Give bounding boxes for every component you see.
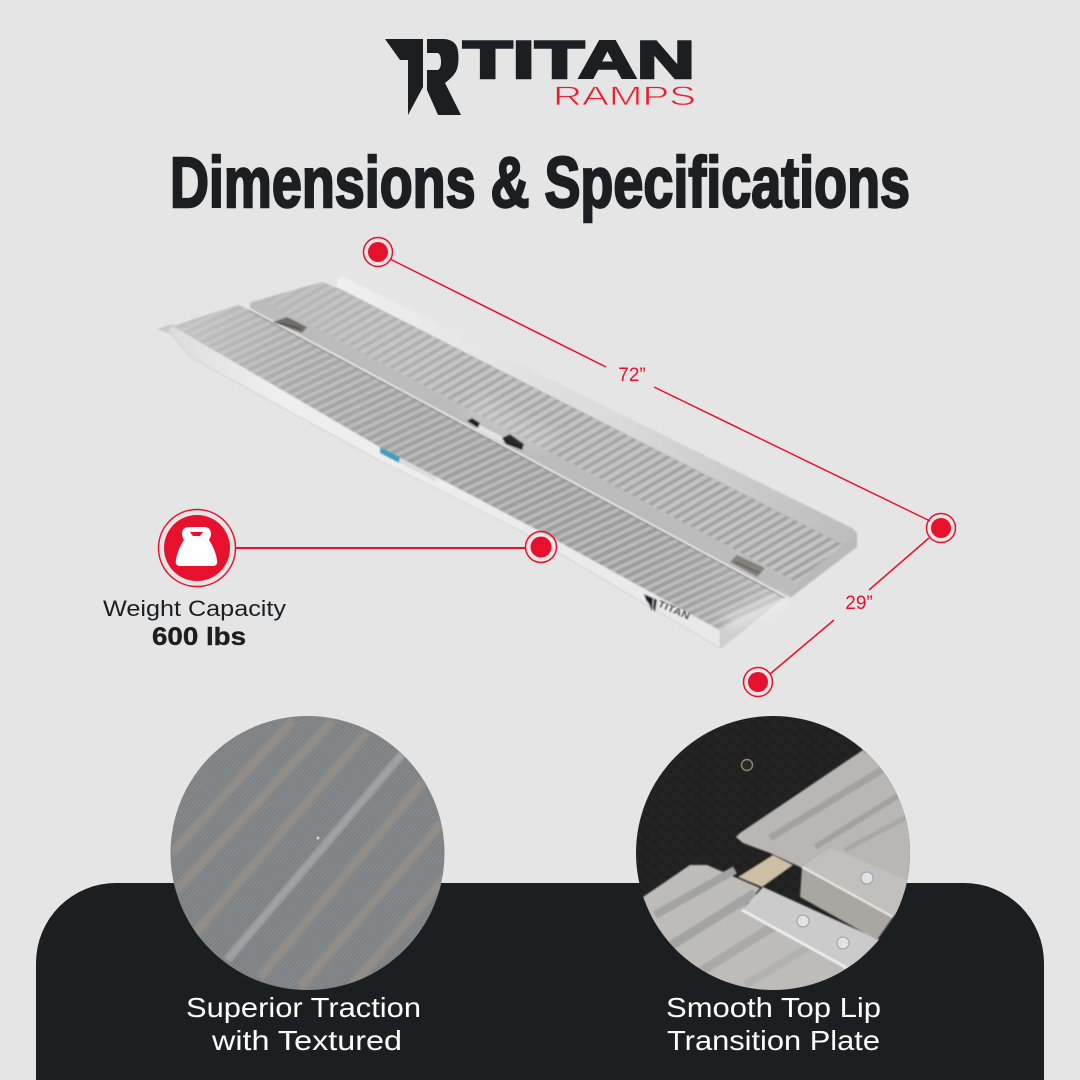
wooden slat: [738, 855, 793, 887]
mounting hole: [742, 760, 752, 770]
callout line: [236, 547, 526, 549]
upper plate: [736, 750, 910, 882]
middle latch: [467, 418, 524, 450]
blue label: [380, 447, 400, 463]
weight capacity callout: [103, 510, 556, 651]
upper ribbed panel: [248, 282, 843, 590]
lower ribbed panel: [173, 305, 785, 630]
far hinge: [273, 317, 307, 333]
far tip: [157, 324, 177, 336]
logo wordmark: TITAN: TITAN: [463, 31, 695, 90]
upper end lip: [785, 533, 857, 598]
caption: transition plate: Smooth Top Lip: [666, 992, 881, 1023]
right bracket top: [800, 846, 907, 918]
caption: textured traction: [186, 992, 421, 1056]
dimension: 72 inch: [364, 238, 956, 542]
label: weight capacity: Weight Capacity: [103, 596, 286, 621]
dimension: 29 inch: [744, 538, 929, 696]
logo: Titan Ramps: [385, 31, 696, 115]
logo mark: [385, 39, 461, 115]
white sticker: [400, 458, 436, 481]
dimension line: [869, 538, 929, 590]
rivets: [797, 872, 873, 949]
caption: textured traction: with Textured: [211, 1025, 402, 1056]
ramp logo text: TITAN: [656, 599, 691, 623]
dark bottom panel: [36, 883, 1044, 1080]
left bracket: [742, 887, 880, 970]
photo circle: transition plate: [636, 716, 910, 990]
dimension line: [390, 259, 606, 367]
rubber mat: [636, 716, 910, 936]
upper panel sheen: [248, 282, 843, 590]
aluminium ramp: [157, 277, 857, 648]
ramp logo mark: [644, 594, 657, 612]
callout marker: [526, 532, 556, 562]
lower panel sheen: [173, 305, 785, 630]
marker: [926, 514, 956, 542]
centre seam: [250, 309, 785, 598]
logo wordmark: RAMPS: RAMPS: [553, 81, 696, 111]
icon: kettlebell weight: [158, 510, 236, 586]
top rail: [337, 277, 857, 547]
caption: transition plate: Transition Plate: [667, 1025, 880, 1056]
rail inner edge: [337, 288, 843, 545]
caption: textured traction: Superior Traction: [186, 992, 421, 1023]
photo circle: textured surface: [170, 716, 460, 1000]
centre hinge lane: [250, 300, 800, 597]
label: 29”: [845, 593, 873, 614]
ramp logo: [644, 594, 691, 623]
label: 72”: [618, 365, 646, 386]
near hinge: [730, 555, 765, 577]
value: 600 lbs: 600 lbs: [152, 623, 246, 651]
caption: transition plate: [666, 992, 881, 1056]
lower plate: [643, 864, 848, 990]
marker: [364, 238, 392, 266]
side plate: [168, 326, 720, 648]
sheen highlights: [460, 395, 790, 628]
marker: [744, 668, 772, 696]
near end lip: [720, 597, 785, 648]
right bracket side: [800, 867, 893, 940]
